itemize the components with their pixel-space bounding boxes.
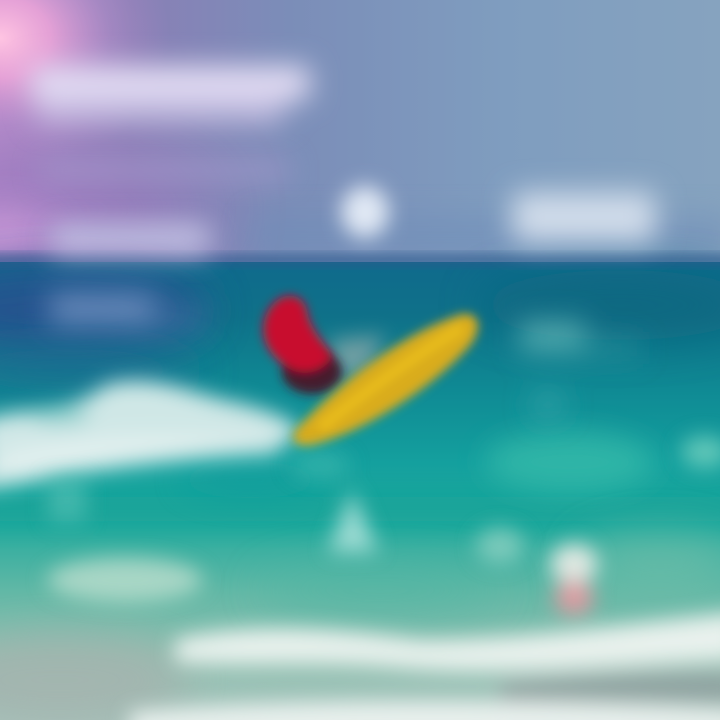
yellow board bbox=[293, 314, 478, 446]
label blur: right bbox=[512, 192, 656, 242]
label blur: centre dot bbox=[341, 186, 389, 238]
sea text blur: right bbox=[520, 322, 640, 419]
subtitle blur bbox=[40, 158, 290, 182]
sky background bbox=[0, 0, 720, 270]
headline blur: title bbox=[30, 66, 310, 124]
wave splash behind board bbox=[0, 381, 300, 490]
sea text blur: left bbox=[50, 294, 205, 328]
kiter: dark shorts bbox=[282, 350, 342, 394]
pink light flare bbox=[0, 0, 170, 173]
sea background bbox=[0, 262, 720, 720]
foam patches in water bbox=[47, 436, 720, 602]
distant swimmer bbox=[550, 544, 598, 616]
label blur: lower left bbox=[50, 224, 210, 254]
kiter: harness line and legs bbox=[330, 335, 385, 380]
horizon bbox=[0, 254, 720, 266]
breaking wave foreground bbox=[130, 612, 720, 720]
kiter: red jacket bbox=[263, 296, 332, 373]
